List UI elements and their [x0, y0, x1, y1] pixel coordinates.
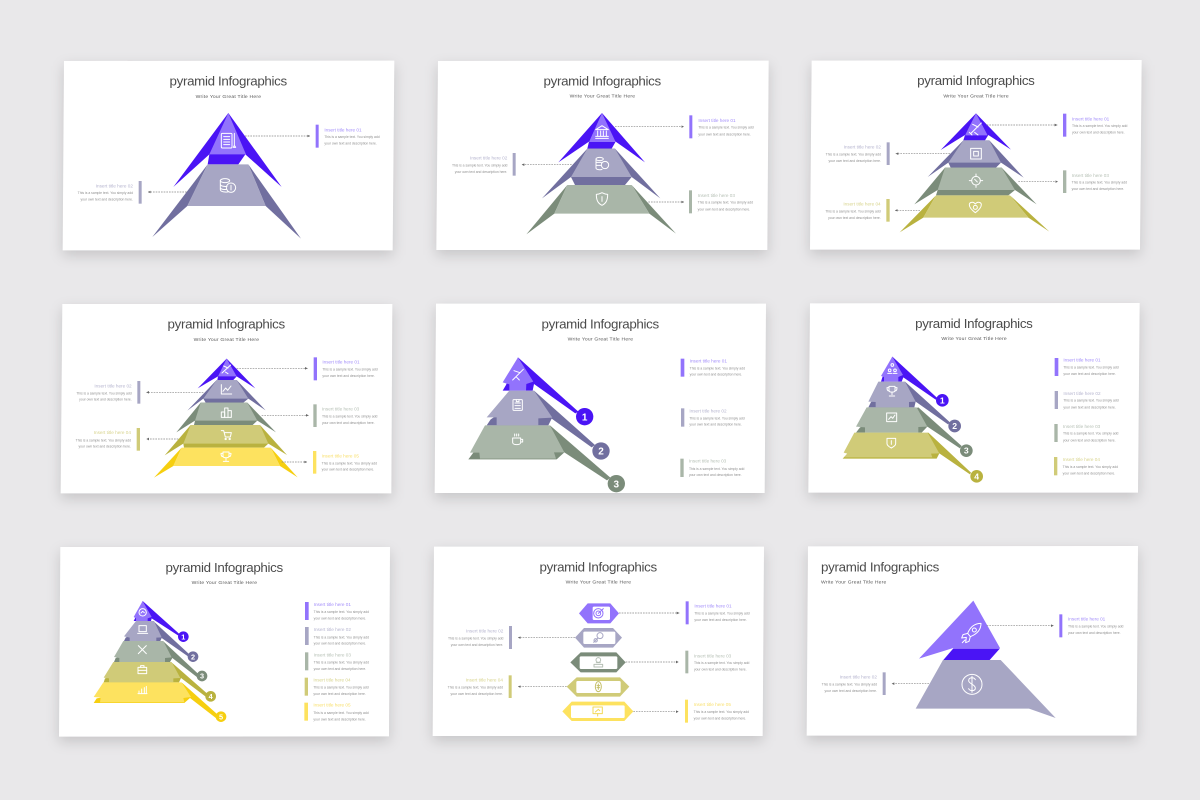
text block 1: Insert title here 01 [1072, 116, 1110, 121]
text block 4 [76, 428, 140, 451]
text block 3: your own text and description here. [1072, 187, 1124, 191]
text block 4 [1054, 457, 1118, 475]
arrow 5 [633, 711, 679, 713]
number badge 1 [576, 408, 593, 425]
arrow 4 [518, 686, 567, 688]
text block 1 [305, 602, 369, 620]
number badge 3: 3 [964, 446, 969, 456]
heading: pyramid Infographics [169, 74, 287, 89]
arrow to label 1 [245, 135, 310, 137]
text block 1: Insert title here 01 [324, 127, 362, 132]
text block 3: This is a sample text. You simply add [694, 661, 749, 665]
text block 4 [305, 678, 369, 696]
slide card [808, 303, 1140, 498]
hexagon 3 [570, 652, 626, 672]
text block 3 [1054, 424, 1118, 442]
icon: laptop [138, 626, 148, 633]
text block 2: Insert title here 02 [844, 145, 881, 150]
text block 4: Insert title here 04 [466, 678, 503, 683]
hexagon 5 [562, 702, 633, 721]
text block 4: This is a sample text. You simply add [1063, 465, 1118, 469]
number badge 1: 1 [940, 395, 945, 405]
text block 4: your own text and description here. [313, 692, 366, 696]
text block 1: your own text and description here. [314, 616, 366, 620]
pyramid tier 4 [165, 425, 287, 455]
pyramid tier 3 [914, 168, 1037, 204]
subheading: Write Your Great Title Here [194, 337, 259, 343]
number badge 2: 2 [598, 447, 604, 458]
text block 2: Insert title here 02 [314, 627, 351, 632]
icon: dollar coin [595, 682, 601, 692]
pyramid tier 1 [558, 113, 645, 162]
text block 2: This is a sample text. You simply add [78, 191, 133, 195]
text block 3 [305, 652, 369, 671]
text block 3: Insert title here 03 [698, 193, 735, 198]
text block 1: This is a sample text. You simply add [314, 610, 369, 614]
text block 1: your own text and description here. [324, 141, 377, 145]
text block 3: your own text and description here. [694, 668, 747, 672]
icon: person at desk [594, 658, 603, 667]
number badge 1 [178, 631, 189, 642]
number badge 3: 3 [614, 479, 620, 490]
heading: pyramid Infographics [915, 316, 1033, 331]
icon: coins [220, 179, 236, 192]
heading: pyramid Infographics [543, 74, 661, 89]
pyramid tier 1 [173, 113, 282, 187]
subheading: Write Your Great Title Here [821, 579, 887, 585]
number badge 2 [948, 420, 961, 432]
text block 2: Insert title here 02 [96, 183, 133, 188]
text block 2: This is a sample text. You simply add [826, 153, 881, 157]
pyramid tier 2 [916, 660, 1056, 718]
icon: rocket [962, 623, 981, 643]
slide card [807, 546, 1138, 741]
slide card [810, 60, 1142, 255]
text block 2: This is a sample text. You simply add [76, 391, 132, 395]
text block 3: your own text and description here. [689, 473, 742, 477]
text block 1: Insert title here 01 [694, 604, 732, 609]
text block 2: your own text and description here. [828, 159, 881, 163]
text block 1: Insert title here 01 [698, 118, 736, 123]
icon: crossed tools [138, 646, 146, 654]
arrow 2 [146, 391, 203, 393]
text block 2: your own text and description here. [451, 643, 503, 647]
text block 2 [76, 381, 140, 404]
text block 5: your own text and description here. [313, 717, 366, 721]
arrow 4 [895, 209, 920, 211]
arrow 1 [619, 612, 679, 614]
text block 4: your own text and description here. [828, 216, 881, 220]
text block 2: your own text and description here. [455, 170, 507, 174]
number badge 4 [205, 691, 216, 702]
text block 3 [313, 404, 377, 427]
pyramid tier 4 [104, 662, 208, 697]
icon: line chart [221, 385, 232, 394]
number badge 2 [188, 651, 198, 662]
text block 1: Insert title here 01 [690, 358, 727, 363]
icon: gear [969, 174, 983, 187]
pyramid tier 2 [187, 380, 266, 411]
text block 2: your own text and description here. [314, 642, 366, 646]
icon: plane [513, 369, 523, 380]
text block 2: Insert title here 02 [1063, 391, 1101, 396]
text block 3 [685, 651, 749, 673]
text block 3: This is a sample text. You simply add [1072, 181, 1127, 185]
text block 1: This is a sample text. You simply add [1063, 366, 1119, 370]
icon: heart [969, 202, 981, 213]
text block 3: This is a sample text. You simply add [314, 661, 369, 665]
text block 4: This is a sample text. You simply add [76, 438, 131, 442]
slide card [59, 547, 390, 742]
text block 3 [1063, 170, 1127, 193]
text block 2: This is a sample text. You simply add [822, 683, 877, 687]
icon: dollar coin [962, 674, 982, 694]
text block 3: your own text and description here. [314, 667, 366, 671]
text block 5: This is a sample text. You simply add [313, 711, 369, 715]
number badge 1 [936, 394, 949, 407]
text block 1 [1055, 358, 1119, 376]
panel: slide 3, four-tier pyramid [810, 60, 1142, 255]
text block 2: Insert title here 02 [840, 675, 877, 680]
text block 1: your own text and description here. [690, 373, 742, 377]
text block 3: Insert title here 03 [689, 459, 727, 464]
text block 5: This is a sample text. You simply add [694, 710, 749, 714]
icon: trophy [221, 452, 231, 461]
arrow 2 [892, 683, 929, 685]
text block 1 [686, 601, 750, 624]
text block 5 [685, 700, 749, 723]
text block 1 [1059, 614, 1123, 637]
text block 4 [448, 675, 512, 698]
icon: bar chart [138, 686, 147, 694]
text block 3: Insert title here 03 [322, 406, 360, 411]
arrow 1 [615, 126, 684, 128]
text block 1 [316, 125, 380, 148]
icon: square frame [971, 148, 981, 159]
panel: slide 7, five numbered tiers [59, 547, 390, 742]
text block 2 [305, 627, 369, 646]
pyramid tier 3 [176, 403, 276, 432]
text block 2: This is a sample text. You simply add [452, 163, 507, 167]
text block 2: your own text and description here. [1063, 405, 1116, 409]
text block 2: Insert title here 02 [689, 409, 727, 414]
text block 1: your own text and description here. [1068, 631, 1121, 635]
text block 2 [452, 153, 516, 176]
icon: coffee cup [513, 434, 523, 445]
text block 2: Insert title here 02 [470, 156, 508, 161]
text block 4: This is a sample text. You simply add [448, 686, 503, 690]
text block 2 [448, 626, 512, 649]
text block 1: Insert title here 01 [314, 602, 351, 607]
icon: chart screen [887, 413, 897, 422]
icon: trophy [887, 386, 897, 396]
subheading: Write Your Great Title Here [568, 337, 633, 343]
pyramid tier 2 [928, 140, 1024, 178]
text block 3: This is a sample text. You simply add [322, 415, 377, 419]
text block 1: This is a sample text. You simply add [324, 135, 380, 139]
icon: plane [222, 365, 231, 374]
text block 2 [826, 142, 890, 165]
arrow 3 [648, 201, 684, 203]
panel: slide 1, two-tier pyramid [63, 61, 394, 255]
slide card [433, 547, 764, 741]
number badge 4: 4 [974, 471, 979, 481]
slide card [63, 61, 394, 255]
text block 1 [689, 115, 754, 138]
subheading: Write Your Great Title Here [566, 580, 631, 586]
arrow 1 [987, 124, 1057, 126]
number badge 4: 4 [209, 692, 214, 701]
pyramid tier 5 [94, 682, 217, 719]
pyramid tier 1 [198, 359, 255, 388]
heading: pyramid Infographics [541, 317, 659, 332]
text block 3: Insert title here 03 [314, 652, 351, 657]
number badge 1: 1 [582, 412, 588, 423]
number badge 3 [197, 671, 207, 681]
arrow to label 2 [148, 191, 187, 193]
pyramid tier 1 [503, 357, 578, 413]
subheading: Write Your Great Title Here [943, 93, 1009, 99]
text block 2 [822, 672, 886, 695]
icon: plane [969, 123, 981, 135]
icon: team [888, 364, 897, 373]
text block 2 [681, 408, 745, 427]
heading: pyramid Infographics [917, 73, 1035, 88]
text block 5: Insert title here 05 [322, 453, 359, 458]
text block 1 [314, 357, 378, 380]
hexagon 1 [579, 603, 619, 623]
subheading: Write Your Great Title Here [196, 94, 261, 100]
icon: document [513, 400, 522, 410]
text block 1: This is a sample text. You simply add [694, 612, 750, 616]
number badge 5: 5 [219, 712, 223, 721]
number badge 2: 2 [952, 421, 957, 431]
text block 1 [1063, 114, 1127, 137]
text block 5: Insert title here 05 [694, 702, 731, 707]
icon: gears [594, 633, 603, 642]
arrow 1 [237, 367, 308, 369]
panel: slide 6, four numbered tiers [808, 303, 1140, 498]
subheading: Write Your Great Title Here [941, 336, 1007, 342]
panel: slide 8, stacked hexagon frames [433, 547, 764, 741]
pyramid tier 3 [114, 641, 198, 677]
arrow 3 [626, 661, 679, 663]
pyramid tier 3 [526, 185, 676, 234]
text block 5: your own text and description here. [322, 468, 374, 472]
pyramid tier 2 [487, 391, 595, 447]
text block 1: Insert title here 01 [1068, 617, 1106, 622]
text block 1: This is a sample text. You simply add [322, 368, 378, 372]
text block 1: This is a sample text. You simply add [690, 366, 745, 370]
text block 2: your own text and description here. [79, 398, 132, 402]
text block 1: This is a sample text. You simply add [698, 126, 754, 130]
text block 4: your own text and description here. [1063, 471, 1115, 475]
pyramid tier 2 [124, 621, 189, 656]
text block 2 [78, 181, 142, 204]
text block 4: your own text and description here. [78, 445, 131, 449]
text block 1: Insert title here 01 [1063, 358, 1101, 363]
text block 3: your own text and description here. [698, 207, 750, 211]
text block 1: This is a sample text. You simply add [1068, 625, 1123, 629]
text block 2: This is a sample text. You simply add [689, 416, 745, 420]
slide card [436, 61, 769, 255]
text block 2: Insert title here 02 [94, 383, 132, 388]
hexagon 4 [567, 677, 629, 697]
pyramid tier 1 [134, 601, 179, 636]
text block 4: This is a sample text. You simply add [825, 209, 881, 213]
heading: pyramid Infographics [165, 560, 283, 575]
pyramid tier 4 [900, 195, 1049, 232]
arrow 2 [522, 164, 572, 166]
pyramid tier 2 [542, 149, 660, 198]
text block 3: Insert title here 03 [694, 653, 732, 658]
icon: shopping cart [221, 431, 231, 440]
arrow 2 [896, 153, 950, 155]
number badge 2: 2 [191, 652, 195, 661]
icon: buildings [221, 408, 231, 417]
text block 5 [304, 703, 369, 721]
text block 1: your own text and description here. [694, 618, 747, 622]
icon: coins [596, 157, 609, 170]
text block 1: Insert title here 01 [322, 360, 360, 365]
pyramid tier 1 [919, 601, 1000, 660]
text block 3: Insert title here 03 [1063, 424, 1101, 429]
text block 4 [825, 199, 890, 222]
icon: gauge [139, 609, 146, 616]
arrow 2 [518, 637, 575, 639]
pyramid tier 3 [856, 407, 962, 448]
text block 3: This is a sample text. You simply add [1063, 432, 1118, 436]
heading: pyramid Infographics [821, 560, 940, 575]
text block 4: your own text and description here. [450, 692, 503, 696]
text block 3: This is a sample text. You simply add [698, 201, 753, 205]
text block 5: your own text and description here. [694, 716, 746, 720]
arrow 3 [262, 414, 309, 416]
text block 2: your own text and description here. [80, 198, 133, 202]
number badge 1: 1 [181, 632, 185, 641]
text block 1: your own text and description here. [698, 132, 751, 136]
text block 1: your own text and description here. [322, 374, 375, 378]
icon: bank [596, 126, 608, 138]
panel: slide 4, five-tier pyramid [61, 304, 392, 498]
pyramid tier 5 [154, 448, 298, 478]
pyramid tier 1 [881, 357, 938, 400]
icon: document and pencil [221, 133, 236, 148]
text block 5: This is a sample text. You simply add [322, 461, 377, 465]
text block 2: This is a sample text. You simply add [448, 637, 503, 641]
text block 1 [681, 358, 745, 377]
number badge 4 [970, 470, 983, 483]
text block 3: your own text and description here. [322, 421, 375, 425]
pyramid tier 2 [868, 382, 950, 424]
number badge 5 [216, 711, 226, 722]
icon: briefcase [138, 666, 147, 674]
text block 4: Insert title here 04 [94, 430, 131, 435]
text block 2 [1055, 391, 1119, 409]
panel: slide 9, rocket and dollar pyramid [807, 546, 1138, 741]
icon: target [594, 609, 603, 618]
text block 5 [313, 451, 377, 474]
heading: pyramid Infographics [167, 317, 285, 332]
subheading: Write Your Great Title Here [570, 94, 635, 100]
panel: slide 5, three numbered tiers [435, 304, 766, 498]
icon: presentation board [593, 707, 602, 716]
number badge 3: 3 [200, 672, 204, 681]
pyramid tier 3 [468, 425, 610, 480]
hexagon 2 [575, 628, 622, 648]
text block 4: Insert title here 04 [313, 678, 351, 683]
slide card [61, 304, 392, 498]
text block 4: This is a sample text. You simply add [313, 686, 369, 690]
icon: shield [596, 193, 608, 205]
text block 1: your own text and description here. [1072, 131, 1125, 135]
text block 4: Insert title here 04 [1063, 457, 1100, 462]
number badge 3 [608, 475, 625, 492]
text block 3: your own text and description here. [1063, 438, 1116, 442]
arrow 5 [282, 461, 307, 463]
text block 4: Insert title here 04 [843, 201, 881, 206]
arrow 4 [146, 438, 178, 440]
text block 2: your own text and description here. [824, 689, 877, 693]
text block 3 [689, 190, 753, 213]
slide card [435, 304, 766, 498]
text block 3: Insert title here 03 [1072, 173, 1109, 178]
text block 2: your own text and description here. [689, 423, 742, 427]
text block 1: your own text and description here. [1063, 372, 1116, 376]
number badge 2 [592, 442, 610, 460]
text block 5: Insert title here 05 [313, 703, 351, 708]
text block 3: This is a sample text. You simply add [689, 467, 744, 471]
arrow 3 [1018, 181, 1058, 183]
text block 2: Insert title here 02 [466, 629, 504, 634]
heading: pyramid Infographics [539, 560, 657, 575]
text block 2: This is a sample text. You simply add [1063, 399, 1119, 403]
arrow 1 [987, 625, 1054, 627]
text block 2: This is a sample text. You simply add [314, 635, 369, 639]
pyramid tier 2 [152, 164, 301, 239]
pyramid tier 4 [843, 433, 971, 474]
text block 1: This is a sample text. You simply add [1072, 124, 1127, 128]
pyramid tier 1 [941, 113, 1011, 150]
subheading: Write Your Great Title Here [192, 580, 257, 586]
number badge 3 [960, 444, 973, 457]
text block 3 [680, 459, 744, 477]
panel: slide 2, three-tier pyramid [436, 61, 769, 255]
icon: shield [887, 438, 896, 448]
